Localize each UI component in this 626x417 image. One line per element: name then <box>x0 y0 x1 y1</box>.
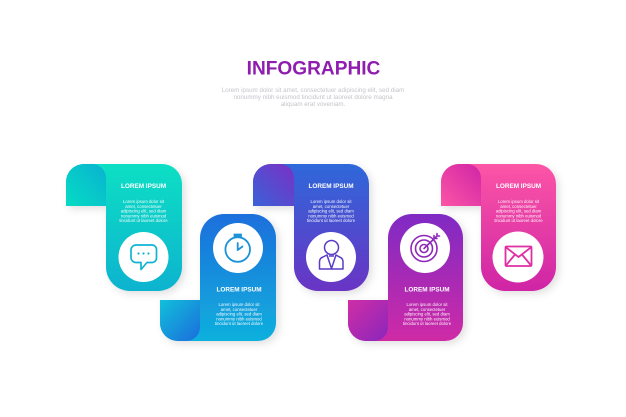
card 3 text: tincidunt ut laoreet dolore <box>307 218 356 223</box>
card 4 text: adipiscing elit, sed diam <box>404 312 450 317</box>
card 5 text: tincidunt ut laoreet dolore <box>494 218 543 223</box>
card 2 text: amet, consectetuer <box>221 307 258 312</box>
card 3 heading: LOREM IPSUM <box>308 183 354 190</box>
card 3 text: nonummy nibh euismod <box>308 213 354 218</box>
subtitle text <box>222 87 404 108</box>
card 4 fold tab <box>348 300 388 341</box>
card 5 text: amet, consectetuer <box>500 204 537 209</box>
card 4 text: amet, consectetuer <box>409 307 446 312</box>
card 5 text <box>494 199 543 223</box>
card 5 heading: LOREM IPSUM <box>496 183 541 190</box>
card 1 text: amet, consectetuer <box>125 204 162 209</box>
icon: stopwatch <box>225 234 250 262</box>
card 5 fold tab <box>441 164 481 206</box>
card 2 text: Lorem ipsum dolor sit <box>218 302 260 307</box>
card 1 text <box>119 199 168 223</box>
subtitle text: aliquam erat voveniam. <box>281 101 346 108</box>
subtitle text: Lorem ipsum dolor sit amet, consectetuer adipiscing elit, sed diam <box>222 87 404 94</box>
card 4 heading: LOREM IPSUM <box>404 286 450 294</box>
card 4 text: tincidunt ut laoreet dolore <box>403 321 452 326</box>
card 1 text: tincidunt ut laoreet dolore <box>119 218 168 223</box>
panel: card 2 blue <box>160 214 276 341</box>
card 4 icon circle <box>400 223 450 273</box>
panel: card 1 teal <box>66 164 182 291</box>
title: INFOGRAPHIC <box>247 58 381 80</box>
card 3 text: Lorem ipsum dolor sit <box>310 199 352 204</box>
subtitle text: nonummy nibh euismod tincidunt ut laoreet dolore magna <box>233 94 393 101</box>
card 2 text: tincidunt ut laoreet dolore <box>215 321 264 326</box>
panel: card 3 indigo <box>253 164 369 291</box>
card 1 text: adipiscing elit, sed diam <box>121 209 167 214</box>
card 4 text: Lorem ipsum dolor sit <box>406 302 448 307</box>
card 1 icon circle <box>118 232 168 282</box>
card 5 text: nonummy nibh euismod <box>496 213 542 218</box>
panel: card 5 pink <box>441 164 556 291</box>
icon: businessperson <box>320 240 343 269</box>
card 5 text: Lorem ipsum dolor sit <box>498 199 540 204</box>
icon: envelope <box>506 246 532 266</box>
card 5 icon circle <box>492 232 544 282</box>
card 2 text: adipiscing elit, sed diam <box>216 312 262 317</box>
card 2 icon circle <box>213 223 263 273</box>
card 5 text: adipiscing elit, sed diam <box>496 209 542 214</box>
card 1 text: nonummy nibh euismod <box>121 213 167 218</box>
card 3 fold tab <box>253 164 294 206</box>
icon: speech bubble <box>131 245 156 270</box>
card 2 text: nonummy nibh euismod <box>216 316 262 321</box>
card 1 text: Lorem ipsum dolor sit <box>123 199 165 204</box>
card 3 icon circle <box>306 232 356 282</box>
icon: target <box>411 234 440 262</box>
card 4 text: nonummy nibh euismod <box>404 316 450 321</box>
card 3 text <box>307 199 356 223</box>
card 1 fold tab <box>66 164 106 206</box>
card 2 heading: LOREM IPSUM <box>216 286 262 294</box>
panel: card 4 purple <box>348 214 463 341</box>
card 4 text <box>403 302 452 326</box>
card 2 fold tab <box>160 300 200 341</box>
card 1 heading: LOREM IPSUM <box>121 183 166 190</box>
card 3 text: adipiscing elit, sed diam <box>308 209 354 214</box>
card 3 text: amet, consectetuer <box>313 204 350 209</box>
card 2 text <box>215 302 264 326</box>
